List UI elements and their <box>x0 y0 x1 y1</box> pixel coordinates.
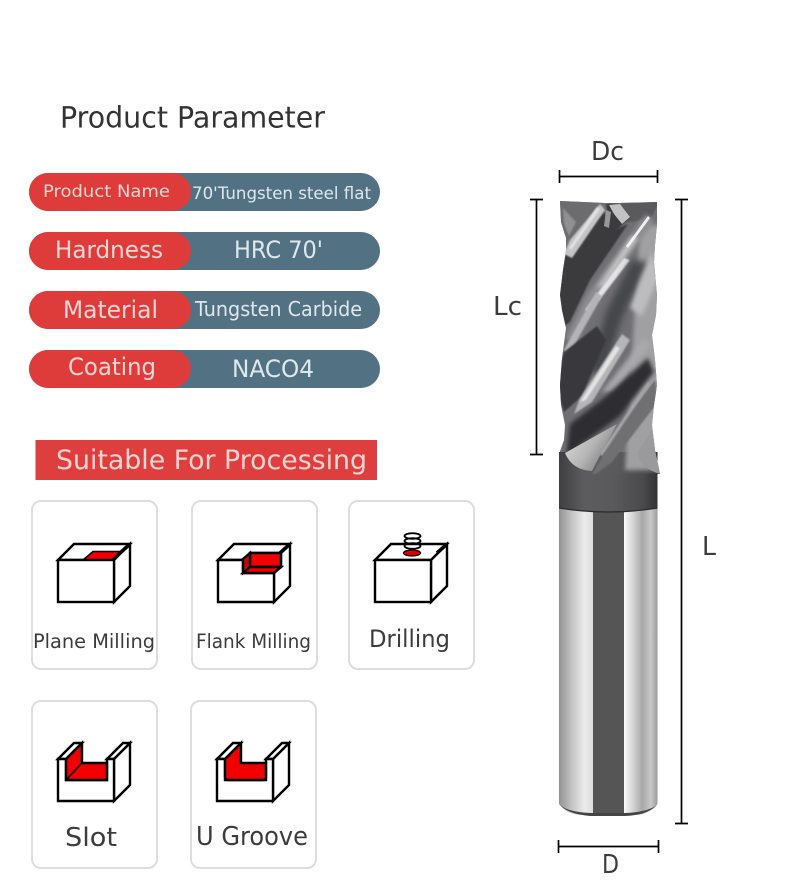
parameter row: product name: 70'Tungsten steel flat <box>192 184 371 204</box>
lower land <box>590 380 658 478</box>
parameter row: hardness <box>29 232 380 270</box>
dark flute three <box>566 358 654 456</box>
light land three <box>564 292 602 356</box>
parameter row: hardness: HRC 70' <box>234 236 323 264</box>
bright land four <box>574 334 630 414</box>
dimension: Lc: Lc <box>493 292 522 322</box>
card: drilling <box>349 501 474 669</box>
dark flute one <box>558 212 628 330</box>
dimension: Dc: Dc <box>591 137 624 167</box>
dimension: D: D <box>602 850 619 880</box>
parameter row: material: Material <box>63 296 158 324</box>
right edge shine <box>625 225 660 470</box>
relief facets <box>565 424 617 471</box>
dimension: Lc <box>493 200 543 454</box>
parameter row: product name <box>29 173 380 211</box>
parameter row: coating: Coating <box>68 353 156 381</box>
parameter row: hardness: Hardness <box>55 236 163 264</box>
card: flank milling <box>192 501 317 669</box>
card: slot: Slot <box>65 823 117 853</box>
icon: flank milling <box>218 544 290 602</box>
card: plane milling <box>32 501 157 669</box>
dimension: D <box>558 840 658 880</box>
parameter row: material <box>29 291 380 329</box>
dark flute two <box>556 326 606 412</box>
parameter row: product name: Product Name <box>43 182 170 202</box>
card: slot <box>32 701 157 868</box>
dimension: L <box>675 200 716 824</box>
card: u groove: U Groove <box>196 822 308 852</box>
dimension: Dc <box>560 137 658 183</box>
end notch <box>606 204 630 232</box>
parameter row: coating: NACO4 <box>232 355 314 383</box>
icon: slot <box>58 743 130 801</box>
title: Product Parameter <box>60 100 325 134</box>
icon: u groove <box>217 743 289 801</box>
dark patch middle <box>590 260 648 374</box>
end mill tool <box>555 198 661 816</box>
card: plane milling: Plane Milling <box>33 630 155 653</box>
section heading: Suitable For Processing <box>56 445 367 476</box>
parameter row: coating <box>29 350 380 388</box>
land two <box>566 214 654 345</box>
tool shank <box>559 508 658 816</box>
icon: plane milling <box>58 544 130 602</box>
top end faces <box>560 201 600 237</box>
card: u groove <box>191 701 316 868</box>
icon: drilling <box>375 533 447 602</box>
parameter row: material: Tungsten Carbide <box>194 297 362 321</box>
card: drilling: Drilling <box>369 625 450 653</box>
dimension: L: L <box>702 532 716 562</box>
card: flank milling: Flank Milling <box>196 630 311 653</box>
tool neck <box>559 452 658 512</box>
tool flutes <box>555 198 661 478</box>
light land one <box>564 204 605 258</box>
